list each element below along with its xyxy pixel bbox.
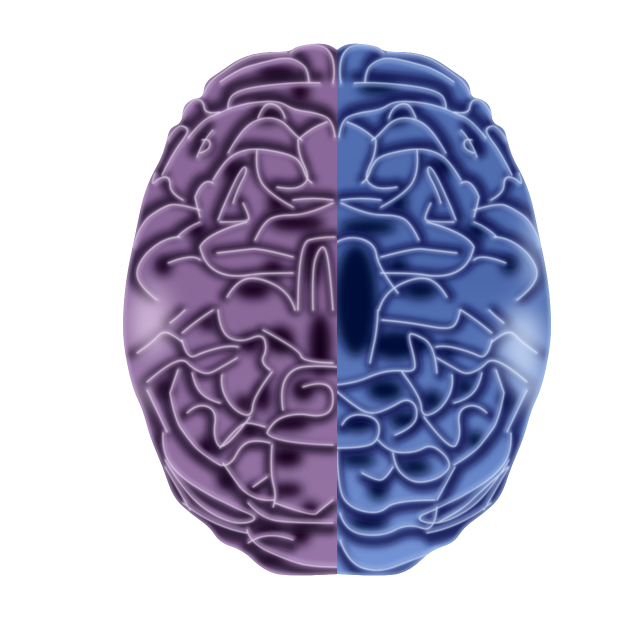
gyrus rims left [133, 45, 337, 567]
gyrus glow left [135, 47, 337, 565]
light area on left flank [127, 286, 170, 413]
dark pits right [335, 79, 519, 530]
panel: left hemisphere (purple) [123, 44, 337, 576]
panel: right hemisphere (blue) [337, 44, 551, 576]
sulci right [335, 37, 547, 578]
light area on right flank [500, 205, 548, 417]
outer rim left [123, 44, 337, 575]
dark pits left [152, 66, 331, 565]
gyrus glow right [335, 47, 539, 568]
outer rim right [337, 44, 551, 575]
gyrus rims right [335, 45, 541, 570]
sulci left [127, 37, 337, 575]
brain illustration [123, 44, 551, 576]
